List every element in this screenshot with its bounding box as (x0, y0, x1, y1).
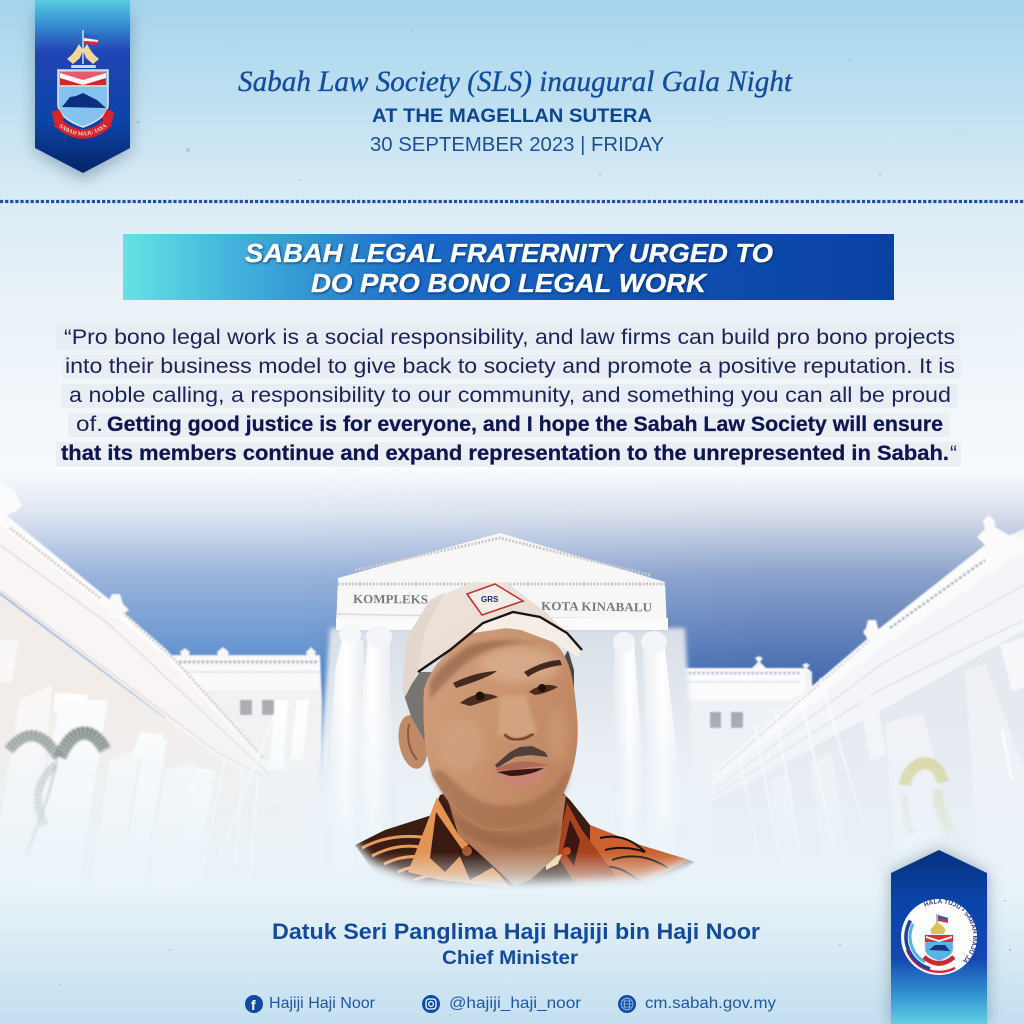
venue: AT THE MAGELLAN SUTERA (372, 105, 652, 127)
quote text block: “ (950, 442, 957, 465)
eyebrows (453, 671, 497, 688)
headline line 2: DO PRO BONO LEGAL WORK (311, 270, 708, 298)
date: 30 SEPTEMBER 2023 | FRIDAY (370, 134, 664, 156)
header ribbon with state crest (26, 0, 138, 185)
neck (448, 795, 566, 886)
moustache and mouth (494, 746, 549, 788)
lower fade (0, 700, 1024, 900)
sky (0, 482, 1024, 772)
quote text block (56, 325, 961, 467)
nose (505, 734, 533, 740)
shirt collars and placket (408, 797, 510, 888)
script event title: Sabah Law Society (SLS) inaugural Gala Night (238, 65, 793, 98)
eyes (460, 694, 498, 706)
quote text block: Getting good justice is for everyone, and I hope the Sabah Law Society will ensure (107, 413, 943, 436)
Facebook: f (251, 997, 256, 1013)
headline line 1: SABAH LEGAL FRATERNITY URGED TO (245, 240, 773, 268)
building illustration: Kompleks Kota Kinabalu (0, 470, 1024, 900)
icon: Sabah state crest (52, 30, 114, 139)
quote text block: of. (76, 413, 103, 436)
Instagram: @hajiji_haji_noor (449, 995, 581, 1012)
frieze lettering: KOMPLEKS (353, 592, 428, 607)
portrait of the Chief Minister (355, 582, 695, 895)
icon: Sabah state crest: SABAH MAJU JAYA (59, 124, 107, 136)
quote text block: into their business model to give back to society and promote a positive reputation. It is (65, 355, 955, 378)
quote text block: “Pro bono legal work is a social responsibility, and law firms can build pro bono projects (64, 326, 955, 349)
GRS baseball cap (402, 582, 582, 697)
frieze lettering: KOTA KINABALU (541, 599, 652, 615)
Facebook: Hajiji Haji Noor (269, 995, 375, 1012)
Website: cm.sabah.gov.my (645, 995, 776, 1012)
GRS baseball cap: GRS (481, 595, 499, 604)
event heading (238, 65, 793, 156)
yellow palm tree (905, 763, 952, 835)
hair (404, 672, 434, 740)
social media row (245, 995, 776, 1013)
left wing of building (0, 478, 322, 895)
name of the Chief Minister: Datuk Seri Panglima Haji Hajiji bin Haji Noor (272, 919, 760, 944)
ear (398, 715, 427, 769)
face (423, 628, 578, 831)
right wing of building (668, 515, 1024, 895)
job title: Chief Minister (442, 948, 579, 969)
portrait bottom fade (335, 852, 710, 897)
quote text block: a noble calling, a responsibility to our community, and something you can all be proud (69, 384, 951, 407)
headline banner (123, 234, 894, 300)
central portico (310, 533, 700, 895)
icon: Hala Tuju Sabah Maju Jaya badge: HALA TUJU • SABAH MAJU JAYA (924, 899, 978, 963)
face shading (430, 640, 570, 831)
frieze lettering (353, 592, 652, 615)
quote text block: that its members continue and expand representation to the unrepresented in Sabah. (61, 442, 949, 465)
batik shirt (355, 790, 695, 895)
palm tree (9, 733, 105, 855)
